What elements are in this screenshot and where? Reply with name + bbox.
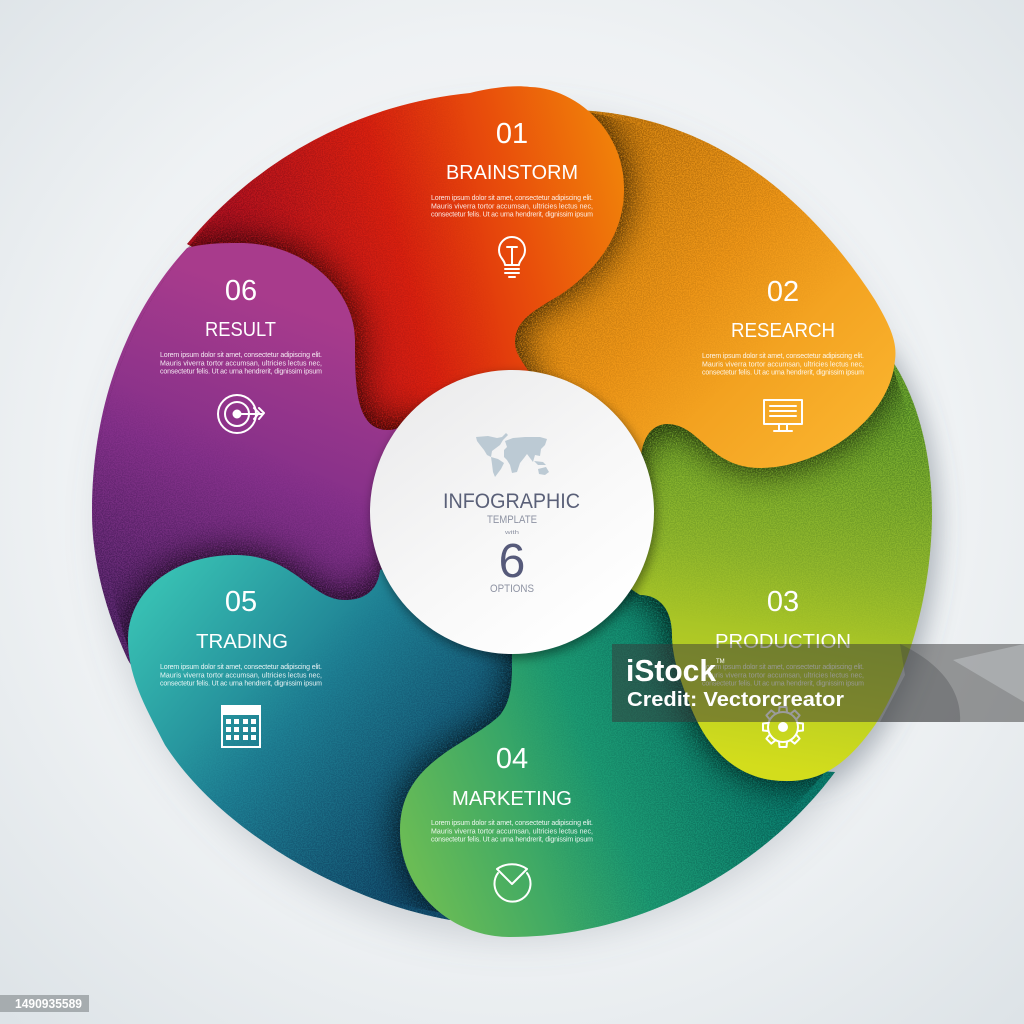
- text block: 06: 06: [225, 275, 257, 307]
- text block: 06: Lorem ipsum dolor sit amet, consectetur adipiscing elit.: [160, 352, 322, 359]
- label: options: OPTIONS: [490, 583, 534, 595]
- watermark: credit: Credit: Vectorcreator: [627, 689, 844, 711]
- panel: 03 production shape: [616, 364, 932, 807]
- label: template: TEMPLATE: [487, 514, 537, 526]
- text block: 04: consectetur felis. Ut ac urna hendrerit, dignissim ipsum: [431, 836, 593, 844]
- text block: 02: 02: [767, 276, 799, 308]
- text block: 05: Mauris viverra tortor accumsan, ultricies lectus nec,: [160, 672, 322, 680]
- icon: target: [218, 395, 264, 433]
- text block: 04: Lorem ipsum dolor sit amet, consectetur adipiscing elit.: [431, 820, 593, 827]
- heading: infographic: INFOGRAPHIC: [443, 490, 580, 513]
- panel: 05 trading shape: [128, 512, 530, 920]
- icon: monitor: [764, 400, 802, 431]
- text block: 01: BRAINSTORM: [446, 161, 578, 184]
- text block: 05: consectetur felis. Ut ac urna hendrerit, dignissim ipsum: [160, 680, 322, 688]
- image id stamp: 1490935589: [15, 997, 82, 1011]
- panel: 06 result lobe overlapping 01: [94, 214, 427, 492]
- text block: 03: 03: [767, 586, 799, 618]
- text block: 02: Lorem ipsum dolor sit amet, consectetur adipiscing elit.: [702, 353, 864, 360]
- text block: 01: [431, 118, 593, 218]
- icon: world map: [476, 433, 549, 477]
- text block: 02: [702, 276, 864, 376]
- text block: 06: [160, 275, 322, 376]
- icon: light bulb: [499, 237, 525, 277]
- panel: 02 research shape: [500, 110, 895, 512]
- text block: 04: [431, 743, 593, 844]
- ground shadow: [104, 114, 940, 938]
- icon: gear: [763, 707, 803, 747]
- text block: 05: Lorem ipsum dolor sit amet, consectetur adipiscing elit.: [160, 664, 322, 671]
- text block: 06: RESULT: [205, 318, 276, 341]
- centre circle: [370, 370, 657, 659]
- text block: 04: 04: [496, 743, 528, 775]
- text block: 05: TRADING: [196, 630, 288, 653]
- panel: 04 marketing shape: [374, 589, 835, 937]
- text block: 05: 05: [225, 586, 257, 618]
- watermark: trademark: TM: [716, 659, 725, 665]
- text block: 06: Mauris viverra tortor accumsan, ultricies lectus nec,: [160, 360, 322, 368]
- text block: 02: Mauris viverra tortor accumsan, ultricies lectus nec,: [702, 362, 864, 368]
- icon: calendar: [222, 706, 260, 747]
- number: 6: 6: [499, 535, 525, 588]
- watermark: iStock: iStock: [626, 653, 717, 688]
- text block: 01: Mauris viverra tortor accumsan, ultricies lectus nec,: [431, 204, 593, 210]
- label: with: with: [504, 530, 519, 536]
- text block: 04: Mauris viverra tortor accumsan, ultricies lectus nec,: [431, 828, 593, 836]
- text block: 01: Lorem ipsum dolor sit amet, consectetur adipiscing elit.: [431, 195, 593, 202]
- text block: 05: [160, 586, 322, 688]
- text block: 03: Mauris viverra tortor accumsan, ultricies lectus nec,: [702, 672, 864, 680]
- text block: 02: consectetur felis. Ut ac urna hendrerit, dignissim ipsum: [702, 370, 864, 376]
- text block: 03: consectetur felis. Ut ac urna hendrerit, dignissim ipsum: [702, 680, 864, 688]
- text block: 01: consectetur felis. Ut ac urna hendrerit, dignissim ipsum: [431, 212, 593, 218]
- watermark band: [612, 644, 1024, 722]
- panel: 01 brainstorm shape: [187, 86, 654, 430]
- icon: pie chart: [494, 864, 530, 902]
- text block: 04: MARKETING: [452, 787, 572, 810]
- text block: 06: consectetur felis. Ut ac urna hendrerit, dignissim ipsum: [160, 368, 322, 376]
- text block: 01: 01: [496, 118, 528, 150]
- text block: 03: PRODUCTION: [715, 630, 851, 653]
- text block: 02: RESEARCH: [731, 319, 835, 342]
- panel: 06 result shape: [92, 246, 382, 665]
- image id stamp: [0, 995, 89, 1012]
- text block: 03: [702, 586, 864, 688]
- text block: 03: Lorem ipsum dolor sit amet, consectetur adipiscing elit.: [702, 664, 864, 671]
